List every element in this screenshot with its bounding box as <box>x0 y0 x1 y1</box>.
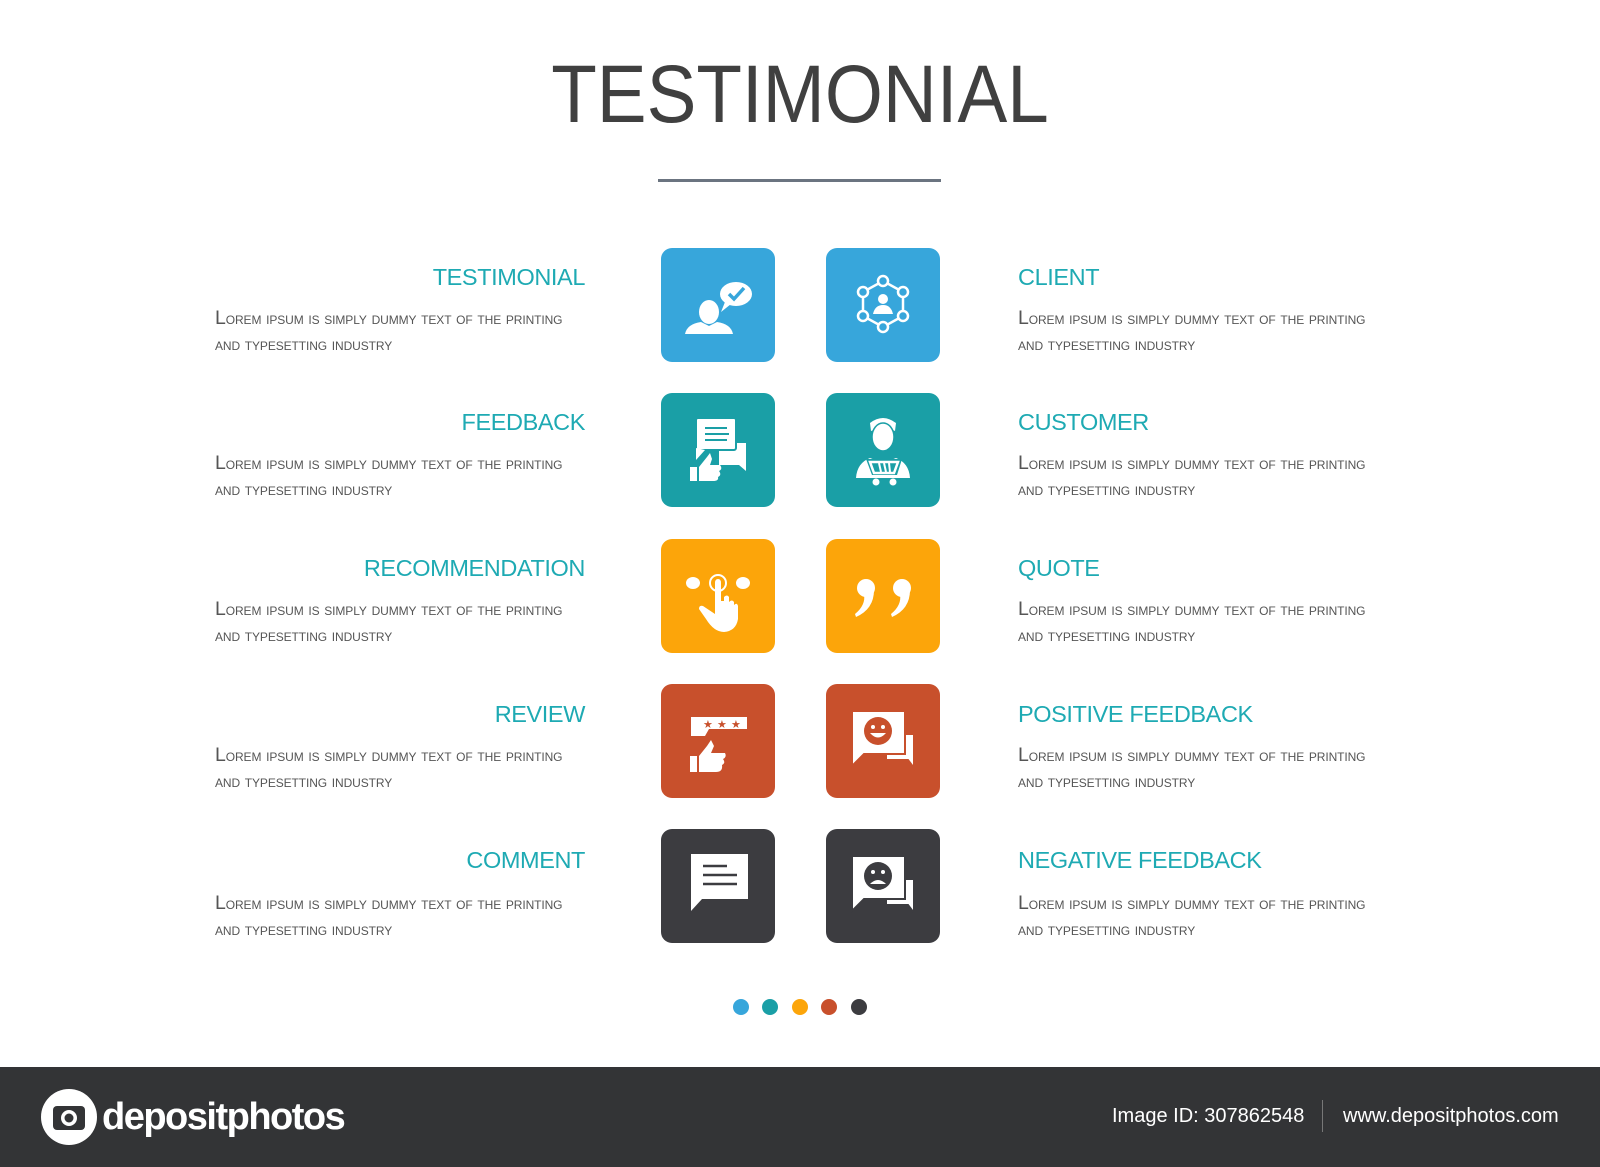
footer logo <box>41 1089 344 1145</box>
heading: quote: QUOTE <box>1018 555 1100 581</box>
heading: positive feedback: POSITIVE FEEDBACK <box>1018 701 1253 727</box>
text: client <box>1018 307 1365 354</box>
heading: feedback: FEEDBACK <box>462 409 585 435</box>
footer url: www.depositphotos.com <box>1343 1105 1559 1127</box>
item: client <box>1018 264 1365 354</box>
icon tile: positive feedback <box>826 684 940 798</box>
footer image id: Image ID: 307862548 <box>1112 1105 1304 1127</box>
item: negative feedback <box>1018 847 1365 939</box>
footer bar <box>0 1067 1600 1167</box>
text: client: and typesetting industry <box>1018 334 1195 354</box>
item: recommendation <box>215 555 585 645</box>
text: negative feedback: and typesetting industry <box>1018 919 1195 939</box>
pagination dots <box>733 999 867 1015</box>
text: recommendation: Lorem ipsum is simply dummy text of the printing <box>215 598 562 620</box>
icon tile: quote <box>826 539 940 653</box>
text: customer: and typesetting industry <box>1018 479 1195 499</box>
icon tile: negative feedback <box>826 829 940 943</box>
icon tile: review: ★ <box>703 718 713 731</box>
text: quote: and typesetting industry <box>1018 625 1195 645</box>
text: comment <box>215 892 562 939</box>
heading: customer: CUSTOMER <box>1018 409 1149 435</box>
heading: comment: COMMENT <box>466 847 585 873</box>
text: recommendation: and typesetting industry <box>215 625 392 645</box>
item: quote <box>1018 555 1365 645</box>
heading: recommendation: RECOMMENDATION <box>364 555 585 581</box>
text: positive feedback: and typesetting industry <box>1018 771 1195 791</box>
footer logo: depositphotos <box>102 1096 344 1138</box>
text: comment: and typesetting industry <box>215 919 392 939</box>
item: feedback <box>215 409 586 499</box>
text: feedback <box>215 452 562 499</box>
heading: negative feedback: NEGATIVE FEEDBACK <box>1018 847 1261 873</box>
heading: client: CLIENT <box>1018 264 1099 290</box>
text: negative feedback: Lorem ipsum is simply dummy text of the printing <box>1018 892 1365 914</box>
text: testimonial: Lorem ipsum is simply dummy text of the printing <box>215 307 562 329</box>
text: review: Lorem ipsum is simply dummy text of the printing <box>215 744 562 766</box>
item: review <box>215 701 586 791</box>
icon tile: testimonial <box>661 248 775 362</box>
item: testimonial <box>215 264 585 354</box>
icon tile: review: ★ <box>717 718 727 731</box>
icon tile: customer <box>826 393 940 507</box>
title: TESTIMONIAL <box>551 49 1049 140</box>
text: customer <box>1018 452 1365 499</box>
text: positive feedback: Lorem ipsum is simply dummy text of the printing <box>1018 744 1365 766</box>
heading: testimonial: TESTIMONIAL <box>433 264 585 290</box>
text: client: Lorem ipsum is simply dummy text of the printing <box>1018 307 1365 329</box>
heading: review: REVIEW <box>495 701 585 727</box>
text: quote <box>1018 598 1365 645</box>
text: feedback: Lorem ipsum is simply dummy text of the printing <box>215 452 562 474</box>
icon tile: review <box>661 684 775 798</box>
text: review <box>215 744 562 791</box>
text: testimonial <box>215 307 562 354</box>
text: testimonial: and typesetting industry <box>215 334 392 354</box>
item: positive feedback <box>1018 701 1365 791</box>
icon tile: feedback <box>661 393 775 507</box>
text: comment: Lorem ipsum is simply dummy text of the printing <box>215 892 562 914</box>
text: positive feedback <box>1018 744 1365 791</box>
text: quote: Lorem ipsum is simply dummy text of the printing <box>1018 598 1365 620</box>
icon tile: review: ★ <box>731 718 741 731</box>
text: feedback: and typesetting industry <box>215 479 392 499</box>
text: review: and typesetting industry <box>215 771 392 791</box>
text: negative feedback <box>1018 892 1365 939</box>
icon tile: recommendation <box>661 539 775 653</box>
item: comment <box>215 847 585 939</box>
text: customer: Lorem ipsum is simply dummy text of the printing <box>1018 452 1365 474</box>
text: recommendation <box>215 598 562 645</box>
item: customer <box>1018 409 1365 499</box>
icon tile: comment <box>661 829 775 943</box>
icon tile: client <box>826 248 940 362</box>
